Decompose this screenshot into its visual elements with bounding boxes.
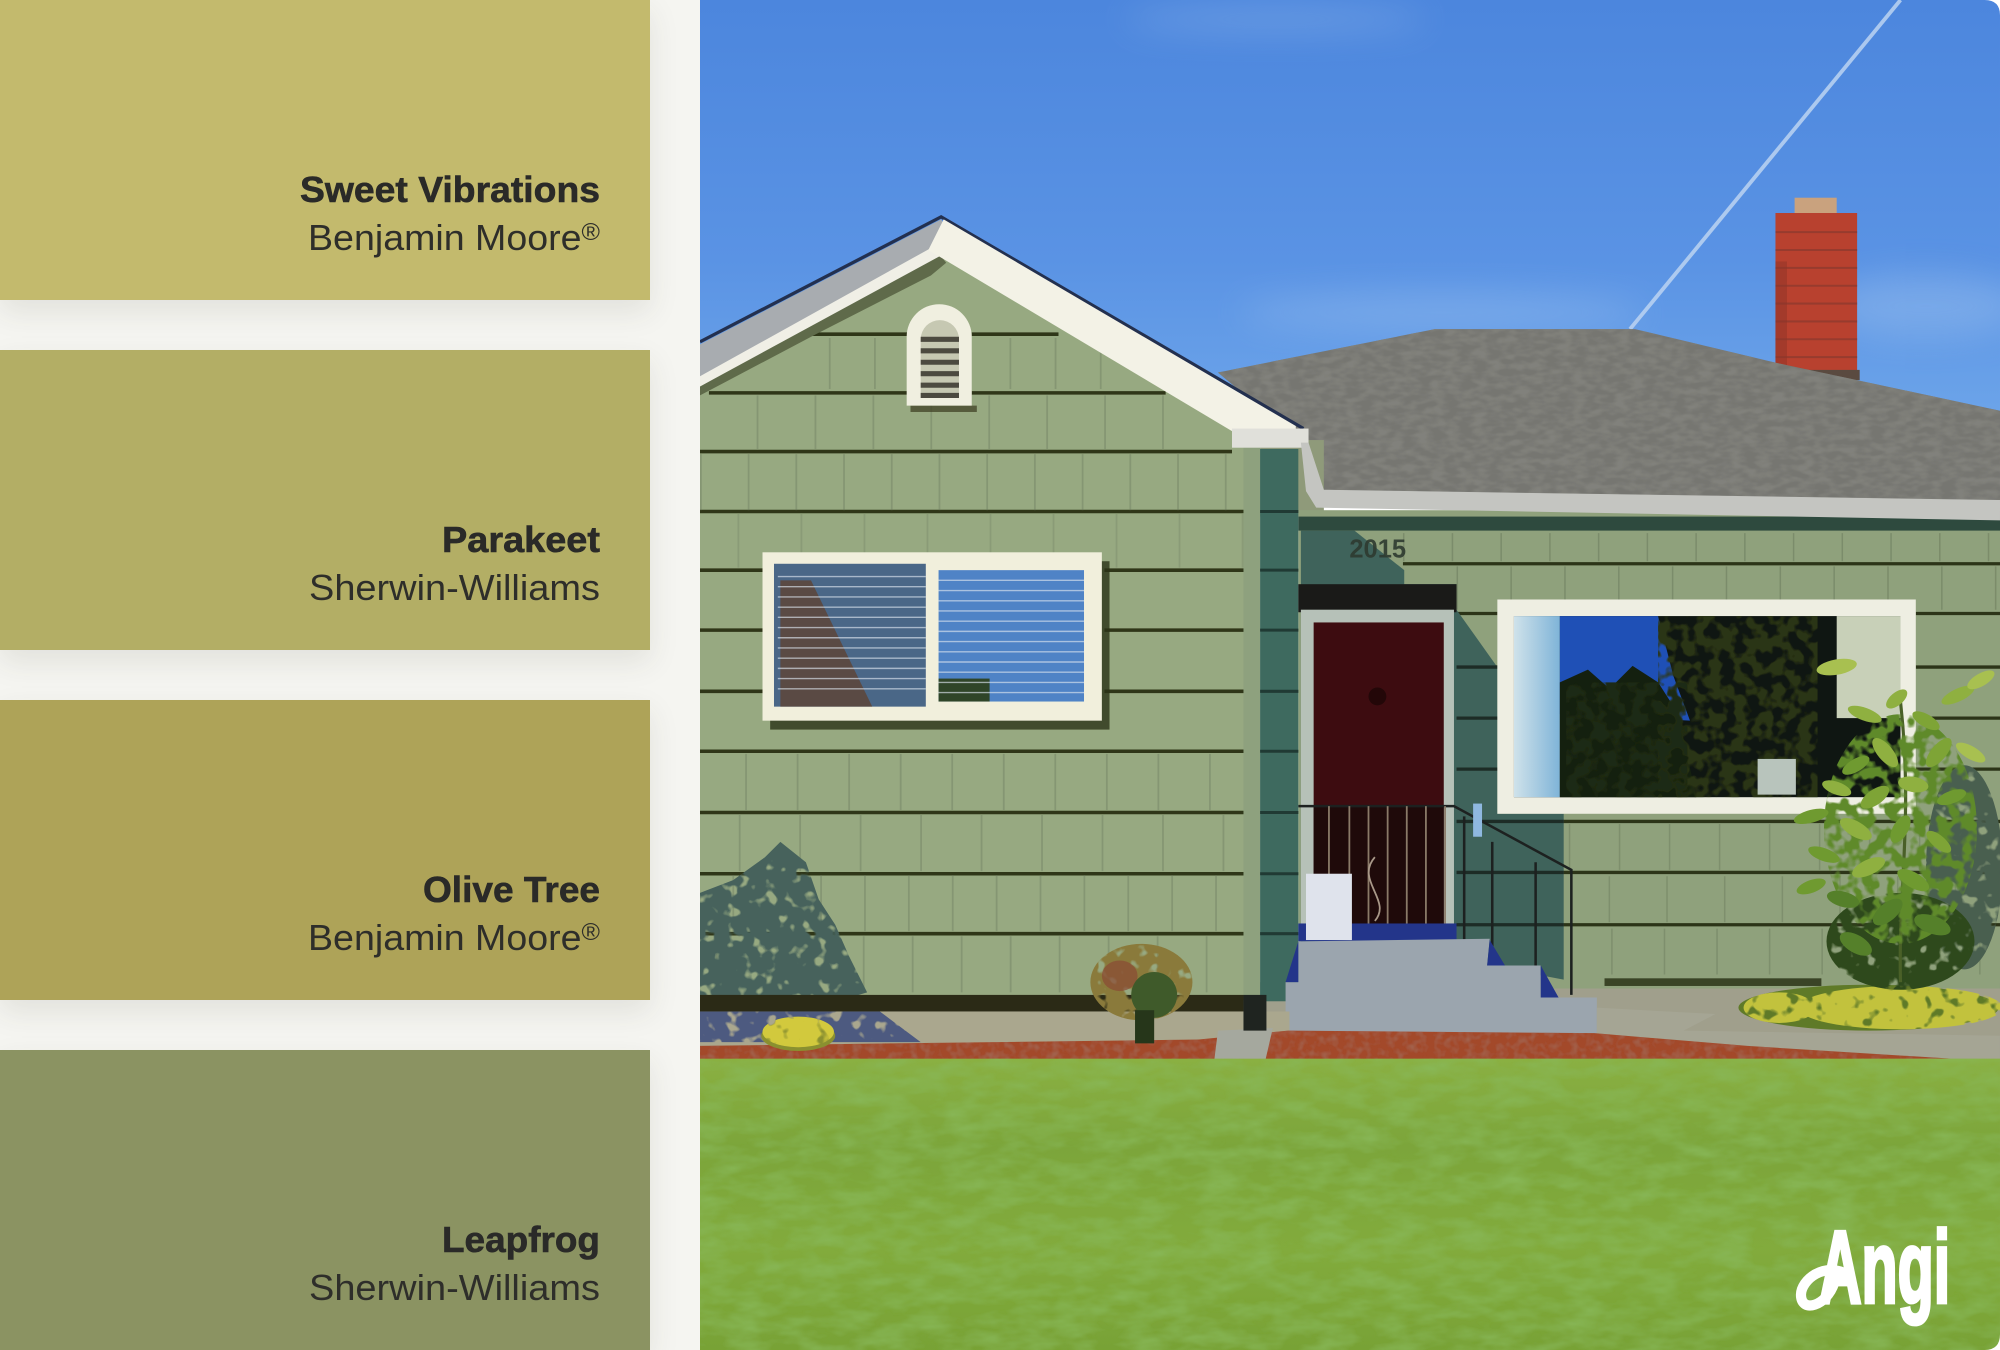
- door header shadow: [1298, 584, 1457, 612]
- brand: Sherwin-Williams: Sherwin-Williams: [309, 1267, 600, 1308]
- lower dark foliage: [1826, 893, 1974, 990]
- roof edge dark line: [700, 217, 1303, 429]
- tree stem: [1900, 702, 1906, 982]
- porch railing: [1298, 806, 1571, 995]
- lawn: [700, 1059, 2000, 1350]
- corner shadow strip: [1260, 449, 1298, 1001]
- brand: Benjamin Moore: Benjamin Moore: [308, 217, 570, 258]
- tree shadow on wall: [700, 842, 867, 1000]
- storm door base blue shadow: [1298, 923, 1457, 941]
- colour name: Olive Tree: Olive Tree: [423, 869, 600, 910]
- logo loop: [1801, 1270, 1849, 1305]
- colour name: Parakeet: Parakeet: [442, 519, 600, 560]
- dark shadow under left fascia: [700, 250, 946, 395]
- shadow siding lines: [1457, 667, 1564, 925]
- right wall siding: [1298, 510, 2000, 989]
- contrail: [1630, 0, 1900, 329]
- brand: Benjamin Moore: ®: [582, 919, 600, 946]
- left gable wall siding: [700, 236, 1256, 1000]
- house number: 2015: [1349, 535, 1406, 563]
- brand: Benjamin Moore: Benjamin Moore: [308, 917, 570, 958]
- left window: [763, 552, 1110, 730]
- panel: Parakeet swatch: [0, 350, 650, 650]
- colour name: Leapfrog: Leapfrog: [442, 1219, 600, 1260]
- cornice: [1232, 429, 1309, 448]
- under-eave base fill: [1260, 440, 1324, 517]
- panel: Olive Tree swatch: [0, 700, 650, 1000]
- yellow flowering plant left: [761, 1017, 835, 1051]
- drain block: [1214, 1028, 1273, 1061]
- downspout: [1243, 446, 1260, 1003]
- gable fascia left white edge: [700, 242, 949, 386]
- Angi logo: [1801, 1208, 1950, 1324]
- eave trim: [1301, 443, 2000, 520]
- individual leaves: [1792, 656, 1997, 961]
- upper foliage: [1824, 714, 1977, 944]
- panel: Leapfrog swatch: [0, 1050, 650, 1350]
- walkway: [1597, 1008, 2000, 1061]
- gable fascia left: [700, 219, 954, 385]
- large front window: [1497, 599, 1916, 814]
- dark siding base and foundation: [700, 995, 1289, 1050]
- package by door: [1306, 874, 1352, 940]
- chimney: [1775, 198, 1860, 380]
- thin clouds: [1122, 8, 2000, 337]
- step shadow: [1286, 940, 1559, 997]
- red door: [1314, 622, 1444, 926]
- illustration: green-sided house photo: [700, 0, 2000, 1350]
- porch shadow on wall: [1301, 531, 1564, 989]
- panel: Sweet Vibrations swatch: [0, 0, 650, 300]
- corner shadow courses: [1260, 511, 1298, 934]
- gable vent: [907, 304, 977, 412]
- mulch bed: [700, 1030, 1949, 1059]
- gable fascia right: [928, 219, 1296, 436]
- tree shadow on right wall: [1926, 765, 2000, 969]
- tree shadow on foundation: [700, 1011, 921, 1042]
- roof: [1218, 329, 2000, 503]
- panel: colour swatch column: [0, 0, 700, 1350]
- young tree: [1792, 656, 2000, 990]
- porch light: [1473, 804, 1482, 837]
- brand: Sherwin-Williams: Sherwin-Williams: [309, 567, 600, 608]
- yellow-green ground plants right: [1738, 985, 2000, 1031]
- small shrub: [1090, 944, 1192, 1043]
- colour name: Sweet Vibrations: Sweet Vibrations: [300, 169, 600, 210]
- downspout elbow: [1243, 995, 1266, 1031]
- brand: Benjamin Moore: ®: [582, 219, 600, 246]
- door frame: [1301, 610, 1454, 936]
- sky: [700, 0, 2000, 434]
- concrete steps: [1286, 939, 1597, 1033]
- ground base behind plants: [1256, 982, 2000, 1064]
